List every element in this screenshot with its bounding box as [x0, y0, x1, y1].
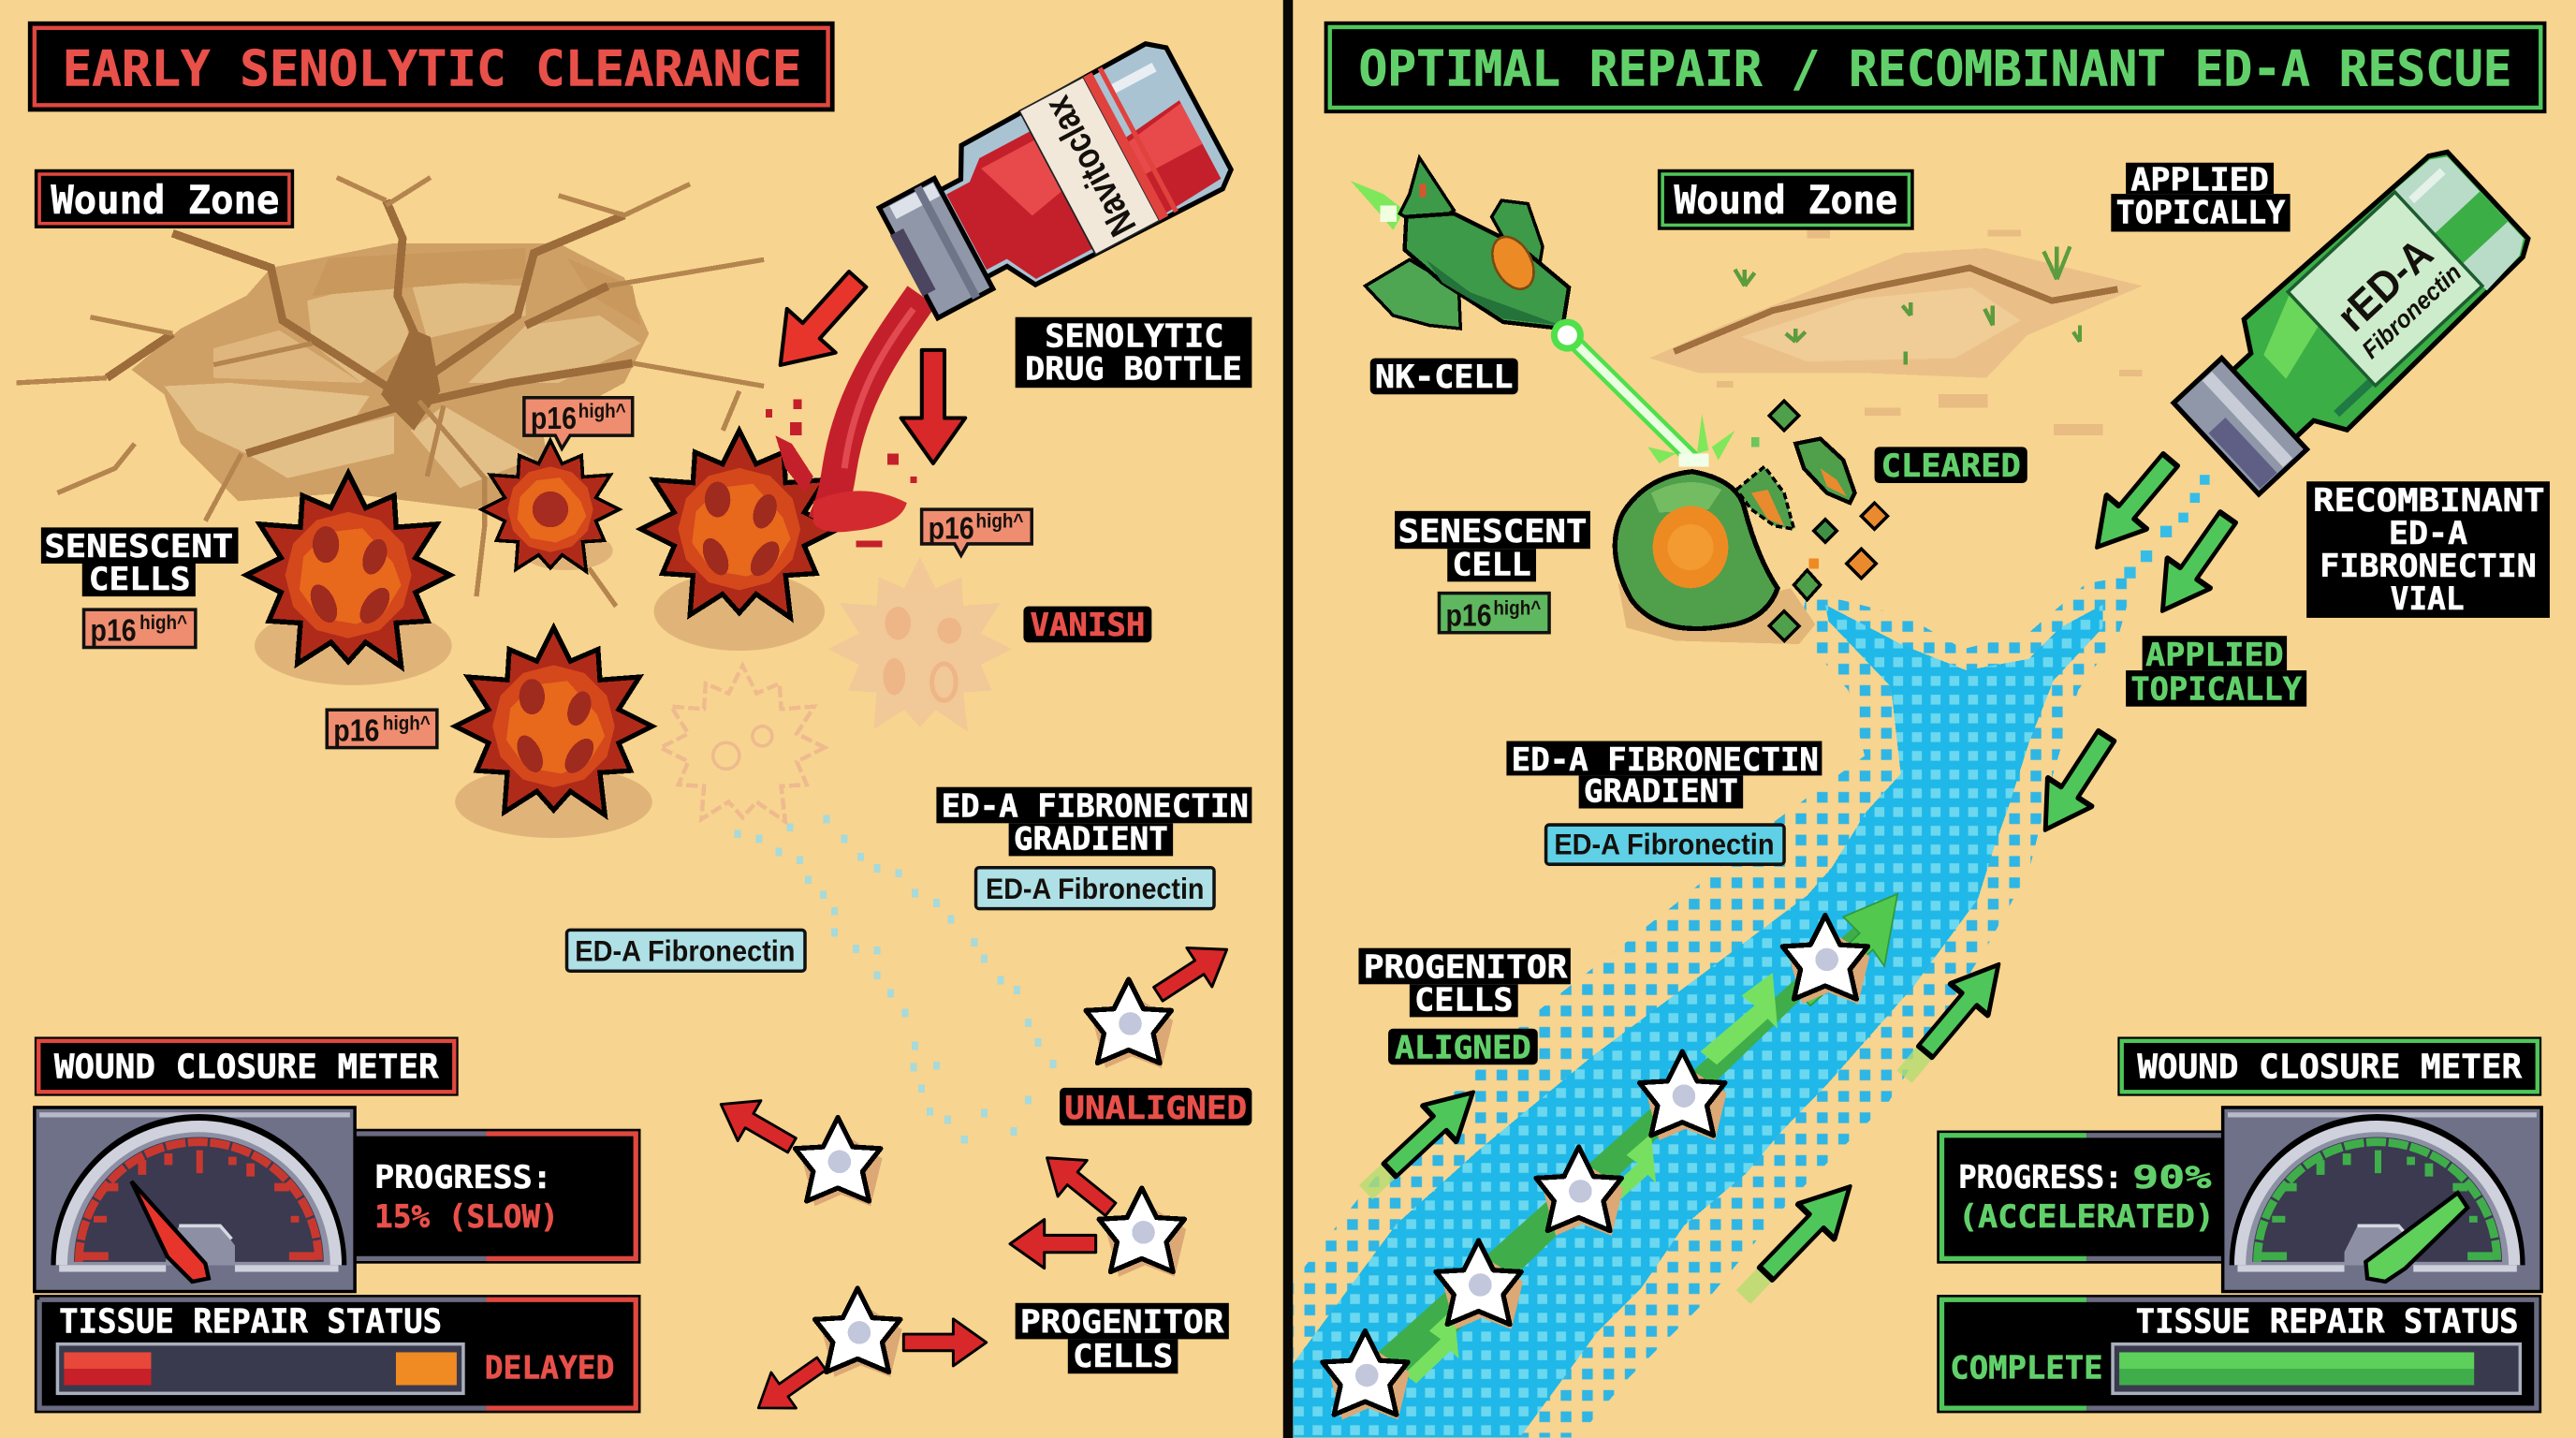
tag: p16 high, top	[524, 398, 633, 448]
wound zone label: Wound Zone	[51, 177, 279, 223]
progenitor cell with two arrows: right	[1010, 1140, 1186, 1277]
label: unaligned: UNALIGNED	[1064, 1090, 1247, 1127]
stream light squares	[1293, 605, 2103, 1438]
title banner: early senolytic clearance	[28, 22, 835, 111]
tissue repair status panel	[35, 1295, 640, 1413]
fibronectin stream	[1293, 475, 2210, 1438]
tag: p16 high, green: p16	[1445, 599, 1492, 634]
cell nucleus	[1653, 506, 1728, 588]
label: senescent cells: SENESCENT	[44, 528, 233, 565]
cockpit	[1484, 229, 1543, 296]
laser beam	[1551, 318, 1694, 460]
exhaust glow	[1351, 181, 1405, 230]
label: ED-A fibronectin gradient	[1506, 741, 1822, 810]
drug bottle: Navitoclax	[867, 37, 1237, 337]
tag: ED-A fibronectin: ED-A Fibronectin	[1554, 828, 1775, 861]
label: progenitor cells: CELLS	[1073, 1338, 1173, 1375]
label: senescent cells: CELLS	[89, 561, 191, 598]
label: applied topically white	[2111, 162, 2291, 232]
tag: ED-A fibronectin upper: ED-A Fibronectin	[986, 872, 1204, 905]
tag: p16 high, lower: high^	[383, 712, 431, 734]
gauge: 15 percent	[35, 1108, 355, 1292]
label: wound closure meter: WOUND CLOSURE METER	[54, 1048, 439, 1086]
progenitor cell with two arrows: lower	[746, 1288, 987, 1426]
label: cleared: CLEARED	[1881, 448, 2021, 485]
label: recombinant ED-A fibronectin vial: ED-A	[2389, 515, 2468, 552]
label: wound closure meter	[35, 1036, 459, 1096]
senescent cell shadows	[255, 531, 825, 838]
label: ED-A fibronectin gradient: GRADIENT	[1584, 772, 1738, 810]
senescent cell 1	[246, 473, 450, 667]
tail fin	[1399, 157, 1454, 230]
arrow: pour direction left	[756, 257, 882, 387]
status bar: complete	[2113, 1344, 2520, 1393]
label: applied topically white: TOPICALLY	[2116, 195, 2286, 232]
impact spark	[1647, 414, 1734, 466]
lysed senescent cell	[1615, 414, 1815, 644]
label: senescent cell: SENESCENT	[1398, 513, 1587, 550]
label: recombinant ED-A fibronectin vial	[2306, 481, 2550, 618]
label: recombinant ED-A fibronectin vial: RECOMBINANT	[2313, 482, 2545, 520]
stream scattered squares	[1293, 575, 2136, 1438]
tag: p16 high, green	[1439, 594, 1549, 634]
arrow: migration left	[1349, 1075, 1490, 1211]
wound zone label	[1658, 169, 1914, 230]
label text: Navitoclax	[1035, 89, 1145, 243]
label: recombinant ED-A fibronectin vial: FIBRONECTIN	[2320, 548, 2537, 585]
bottle liquid	[939, 130, 1094, 298]
label: recombinant ED-A fibronectin vial: VIAL	[2391, 580, 2465, 618]
vial cap	[2174, 358, 2306, 494]
aligned progenitor cells	[1323, 916, 1869, 1419]
tag: p16 high, right: high^	[976, 510, 1023, 532]
arrow: application 2	[2141, 503, 2249, 625]
tag: ED-A fibronectin lower: ED-A Fibronectin	[575, 934, 795, 968]
title banner: early senolytic clearance: EARLY SENOLYTIC CLEARANCE	[63, 40, 801, 97]
title banner: optimal repair: OPTIMAL REPAIR / RECOMBINANT ED-A RESCUE	[1358, 40, 2512, 97]
label: progenitor cells: CELLS	[1414, 981, 1513, 1019]
label: progenitor cells	[1016, 1303, 1229, 1375]
tag: p16 high, top: p16	[531, 402, 577, 436]
label: applied topically white: APPLIED	[2130, 162, 2269, 199]
senescent cell 3	[640, 431, 838, 618]
green alignment lane	[1351, 894, 1897, 1403]
vial: rED-A fibronectin	[2165, 140, 2539, 504]
progress panel: PROGRESS:	[374, 1159, 552, 1196]
tag: p16 high, lower	[327, 710, 437, 749]
ghost cell outline	[661, 666, 825, 822]
upper wing	[1492, 200, 1543, 276]
lower wing	[1365, 259, 1460, 329]
label: progenitor cells: PROGENITOR	[1364, 948, 1568, 986]
progenitor cell with arrow: upper right	[1086, 930, 1239, 1068]
arrow: migration upper	[1885, 948, 2017, 1093]
arrow: application 3	[2023, 722, 2129, 844]
tissue repair status panel: TISSUE REPAIR STATUS	[59, 1302, 442, 1341]
label: senolytic drug bottle: DRUG BOTTLE	[1025, 350, 1242, 388]
label: ED-A fibronectin gradient: GRADIENT	[1014, 820, 1168, 858]
stream core	[1293, 605, 2103, 1438]
label: senescent cell: CELL	[1453, 546, 1531, 583]
progress panel	[1937, 1131, 2232, 1264]
tissue repair status panel: COMPLETE	[1950, 1350, 2103, 1387]
panel: early senolytic clearance	[17, 22, 1251, 1426]
healed wound zone	[1649, 230, 2143, 435]
progress panel	[345, 1129, 640, 1264]
red drug stream	[766, 296, 922, 547]
label: wound closure meter	[2117, 1036, 2541, 1096]
label: NK-cell: NK-CELL	[1375, 359, 1513, 396]
progress panel: PROGRESS:	[1958, 1159, 2123, 1196]
label: senolytic drug bottle	[1016, 317, 1251, 388]
cell shadow	[1618, 583, 1815, 644]
gauge: 90 percent	[2223, 1108, 2541, 1292]
vial label	[2288, 192, 2482, 386]
fibronectin dots: sparse gradient	[735, 815, 1057, 1144]
tissue repair status panel: DELAYED	[485, 1350, 614, 1387]
tag: p16 high, green: high^	[1493, 597, 1541, 619]
label: vanish: VANISH	[1030, 607, 1145, 644]
cell body	[1615, 472, 1778, 629]
label: senescent cells	[41, 527, 238, 598]
cell fragments	[1736, 401, 1888, 640]
tissue repair status panel: TISSUE REPAIR STATUS	[2136, 1302, 2519, 1341]
label: applied topically green	[2126, 636, 2306, 709]
wound zone: cracked ground	[17, 178, 764, 607]
label: aligned: ALIGNED	[1395, 1029, 1531, 1066]
label: applied topically green: TOPICALLY	[2130, 671, 2302, 709]
vial label text: rED-A	[2328, 229, 2442, 341]
tag: p16 high, lower: p16	[333, 714, 379, 749]
tag: p16 high, top: high^	[578, 401, 626, 422]
arrow: application 1	[2077, 443, 2190, 564]
tag: p16 high, right	[922, 509, 1032, 555]
panel: optimal repair	[1293, 22, 2550, 1438]
tissue repair status panel	[1937, 1295, 2541, 1413]
NK-cell ship	[1351, 157, 1569, 329]
tag: p16 high, left: p16	[91, 613, 137, 648]
arrow: migration lower	[1725, 1169, 1868, 1314]
senescent cell 4	[455, 627, 652, 815]
wound zone label: Wound Zone	[1674, 177, 1897, 223]
arrow: pour direction down	[901, 350, 965, 463]
label: senolytic drug bottle: SENOLYTIC	[1045, 317, 1224, 355]
progress panel: (ACCELERATED)	[1958, 1198, 2215, 1236]
vanishing cell	[828, 557, 1012, 732]
bottle cap	[879, 179, 993, 318]
label: senescent cell	[1395, 511, 1590, 583]
label: ED-A fibronectin gradient: ED-A FIBRONECTIN	[942, 787, 1249, 825]
label: ED-A fibronectin gradient: ED-A FIBRONECTIN	[1512, 741, 1819, 779]
tag: p16 high, right: p16	[929, 512, 974, 547]
progress panel: 90%	[2132, 1159, 2212, 1196]
tag: p16 high, left: high^	[139, 612, 187, 634]
tag: p16 high, left	[84, 609, 196, 648]
vial label text: Fibronectin	[2356, 258, 2466, 364]
label: progenitor cells	[1358, 948, 1571, 1019]
vial glass and liquid	[2208, 140, 2539, 463]
label: wound closure meter: WOUND CLOSURE METER	[2137, 1048, 2522, 1086]
progenitor cell with arrow: center	[710, 1084, 882, 1206]
label: progenitor cells: PROGENITOR	[1020, 1303, 1224, 1341]
label: ED-A fibronectin gradient	[936, 787, 1251, 858]
title banner: optimal repair	[1325, 22, 2546, 113]
progress panel: 15% (SLOW)	[374, 1198, 559, 1236]
falling droplets	[2124, 475, 2210, 579]
bottle glass	[916, 37, 1237, 311]
fuselage	[1405, 213, 1569, 329]
senescent cell 2	[481, 440, 620, 571]
center divider	[1283, 0, 1293, 1438]
bottle label	[1019, 77, 1160, 255]
status bar: delayed	[57, 1344, 463, 1393]
label: applied topically green: APPLIED	[2145, 637, 2284, 674]
